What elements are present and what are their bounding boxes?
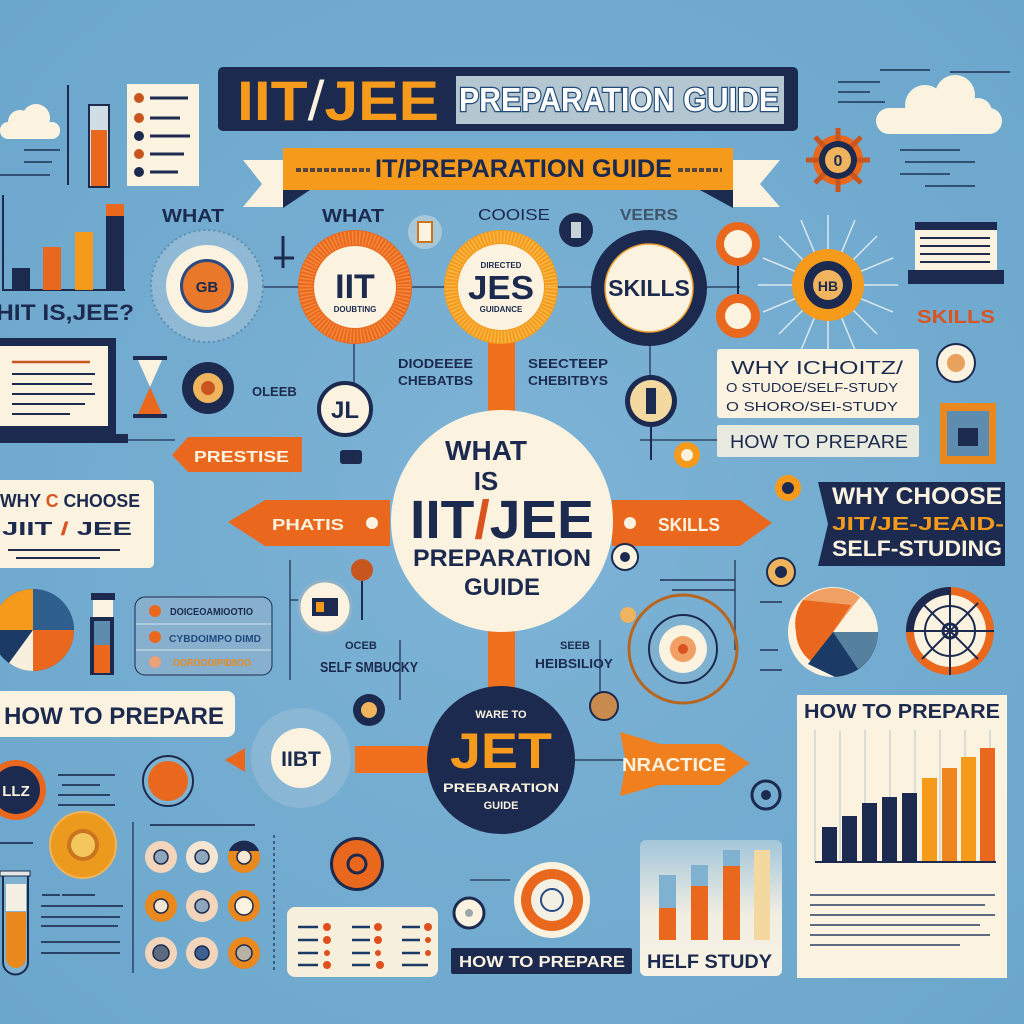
circle: JEE: JES (468, 269, 534, 306)
label: self study: HELF STUDY (647, 952, 772, 973)
tag: prestige (172, 437, 302, 472)
small text lines by target (660, 580, 782, 670)
circle: IIT: DOUBTING (334, 305, 376, 314)
card: how to prepare: HOW TO PREPARE (730, 432, 908, 452)
arrow tag: practice: NRACTICE (622, 755, 726, 775)
small amber icon (674, 442, 700, 468)
heading: Choose: COOISE (478, 207, 550, 224)
label: self study right (535, 640, 613, 671)
small round icon near callout (775, 475, 801, 501)
icon: ring (143, 756, 193, 806)
tube icon (90, 593, 115, 675)
round timer icon (625, 375, 677, 460)
navy circle: JEE: PREBARATION (443, 781, 559, 795)
sunburst badge (758, 215, 898, 355)
icon: small tube badge (408, 215, 442, 249)
test tube icon (0, 871, 30, 974)
top-left cloud icon (0, 104, 60, 139)
bar chart (815, 730, 996, 862)
hourglass icon (133, 358, 167, 416)
label: self study left: OCEB (345, 640, 377, 652)
test tube text lines (41, 895, 123, 953)
icon: small pin glyph (274, 236, 294, 268)
arrow tag: phatis: PHATIS (272, 517, 344, 534)
circle: JEE (444, 230, 558, 344)
checklist card (127, 84, 199, 186)
top-right gear badge (806, 128, 870, 192)
navy circle: JEE: JET (450, 723, 552, 779)
small orange pin (351, 559, 373, 620)
title: preparation guide: PREPARATION GUIDE (459, 81, 779, 118)
tag: prestige: PRESTISE (194, 449, 289, 466)
heading: What: WHAT (162, 206, 224, 226)
card: why ichiit: WHY ICHOITZ/ (731, 358, 903, 378)
label: self study right: HEIBSILIOY (535, 656, 613, 671)
circle: Skills: SKILLS (608, 275, 690, 301)
card: how to prepare chart: HOW TO PREPARE (804, 701, 1000, 723)
icon grid (145, 841, 260, 969)
callout: why choose right (818, 482, 1005, 566)
center circle: main message (391, 410, 613, 632)
circle: left badge (151, 230, 263, 342)
card: why choose left (0, 480, 154, 568)
center circle: main message: IIT/JEE (410, 490, 594, 550)
sunburst badge: HB (818, 278, 838, 294)
server stack icon (908, 222, 1004, 284)
center circle: main message: IS (474, 466, 498, 496)
text: selected: CHEBITBYS (528, 373, 608, 388)
callout: why choose right: WHY CHOOSE (832, 483, 1002, 510)
label: self study right: SEEB (560, 640, 590, 652)
small key icon (454, 898, 484, 928)
small round icon (767, 558, 795, 586)
small top-right text scribbles (0, 70, 1010, 186)
card: why ichiit: O STUDOE/SELF-STUDY (726, 380, 898, 395)
arrow tag: skills (612, 500, 772, 546)
navy circle: JEE (427, 686, 575, 834)
small bar chart top left (3, 195, 125, 290)
icon: lock square (940, 403, 996, 464)
callout: why choose right: JIT/JE-JEAID- (832, 514, 1004, 534)
round key icon: JL (331, 397, 359, 424)
heading: Views: VEERS (620, 207, 678, 224)
text: selected: SEECTEEP (528, 356, 608, 371)
concentric target (629, 595, 737, 703)
small bar card (640, 840, 782, 976)
ribbon subtitle (243, 148, 780, 208)
round key icon (319, 383, 371, 464)
text: differences (398, 356, 473, 388)
center circle: main message: WHAT (445, 435, 527, 466)
circle: left badge: GB (196, 279, 218, 296)
circle: JEE: DIRECTED (481, 261, 522, 270)
arrow tag: practice (620, 732, 750, 796)
badge: bottom left: LLZ (2, 783, 30, 800)
ribbon subtitle: IT/PREPARATION GUIDE (375, 155, 672, 183)
circle: Skills (591, 230, 707, 346)
round icon (182, 362, 234, 414)
navy circle: JEE: GUIDE (484, 800, 518, 812)
small icons right of skills (716, 222, 760, 338)
center circle: main message: GUIDE (464, 574, 540, 601)
label: how to prepare left (0, 691, 235, 737)
orange connectors (355, 340, 515, 773)
card: why ichiit: O SHORO/SEI-STUDY (726, 399, 898, 414)
title banner (218, 67, 798, 132)
navy circle: JEE: WARE TO (475, 709, 527, 721)
callout: why choose right: SELF-STUDING (832, 536, 1002, 561)
text: differences: DIODEEEE (398, 356, 473, 371)
circle: IIBT: IIBT (281, 748, 321, 771)
label: skills right: SKILLS (917, 307, 995, 327)
small icon label: OLEEB (252, 384, 297, 399)
orange ring icon (330, 837, 384, 891)
wheel chart (906, 587, 994, 675)
text: differences: CHEBATBS (398, 373, 473, 388)
card: why ichiit (717, 349, 919, 418)
list card left: OOROOOIPIDIIOO (173, 658, 251, 669)
label: self study left (320, 640, 418, 676)
center circle: main message: PREPARATION (413, 545, 591, 572)
card: how to prepare chart (797, 695, 1007, 978)
circle: IIBT (225, 708, 351, 808)
top-right gear badge: 0 (834, 153, 843, 170)
pie chart right (788, 587, 878, 677)
label: self study left: SELF SMBUCKY (320, 659, 418, 676)
circle: IIT: IIT (335, 268, 375, 306)
label: how to prepare bottom (451, 948, 632, 974)
thermometer panel (68, 85, 109, 187)
card: why choose left: JIIT / JEE (2, 519, 132, 539)
list card left: DOICEOAMIOOTIO (170, 607, 253, 618)
label: how to prepare bottom: HOW TO PREPARE (459, 954, 625, 971)
gold medallion (50, 812, 116, 878)
card: why choose left: WHY C CHOOSE (0, 491, 140, 511)
icon: round badge right (937, 344, 975, 382)
arrow tag: skills: SKILLS (658, 515, 720, 535)
circle: IIT (298, 230, 412, 344)
dial icon (514, 862, 590, 938)
small icon right of practice (752, 781, 780, 809)
card: how to prepare (717, 425, 919, 457)
pie chart left (0, 589, 74, 671)
text lines bottom left (0, 775, 255, 843)
laptop icon (0, 338, 128, 443)
arrow tag: phatis (228, 500, 390, 546)
table card (287, 907, 438, 977)
heading: What 2: WHAT (322, 206, 384, 226)
label: how to prepare left: HOW TO PREPARE (4, 703, 224, 730)
circle icon: video (299, 581, 351, 633)
text: selected (528, 356, 608, 388)
list card left (135, 597, 272, 675)
small icons row (353, 692, 618, 726)
icon: small navy badge (559, 213, 593, 247)
list card left: CYBDOIMPO DIMD (169, 634, 261, 645)
title: IIT/JEE: IIT/JEE (237, 69, 439, 132)
connector lines (110, 287, 740, 973)
small round icons middle right (612, 544, 638, 623)
circle: JEE: GUIDANCE (480, 305, 523, 314)
top-right cloud icon (876, 75, 1002, 134)
badge: bottom left (0, 760, 46, 820)
